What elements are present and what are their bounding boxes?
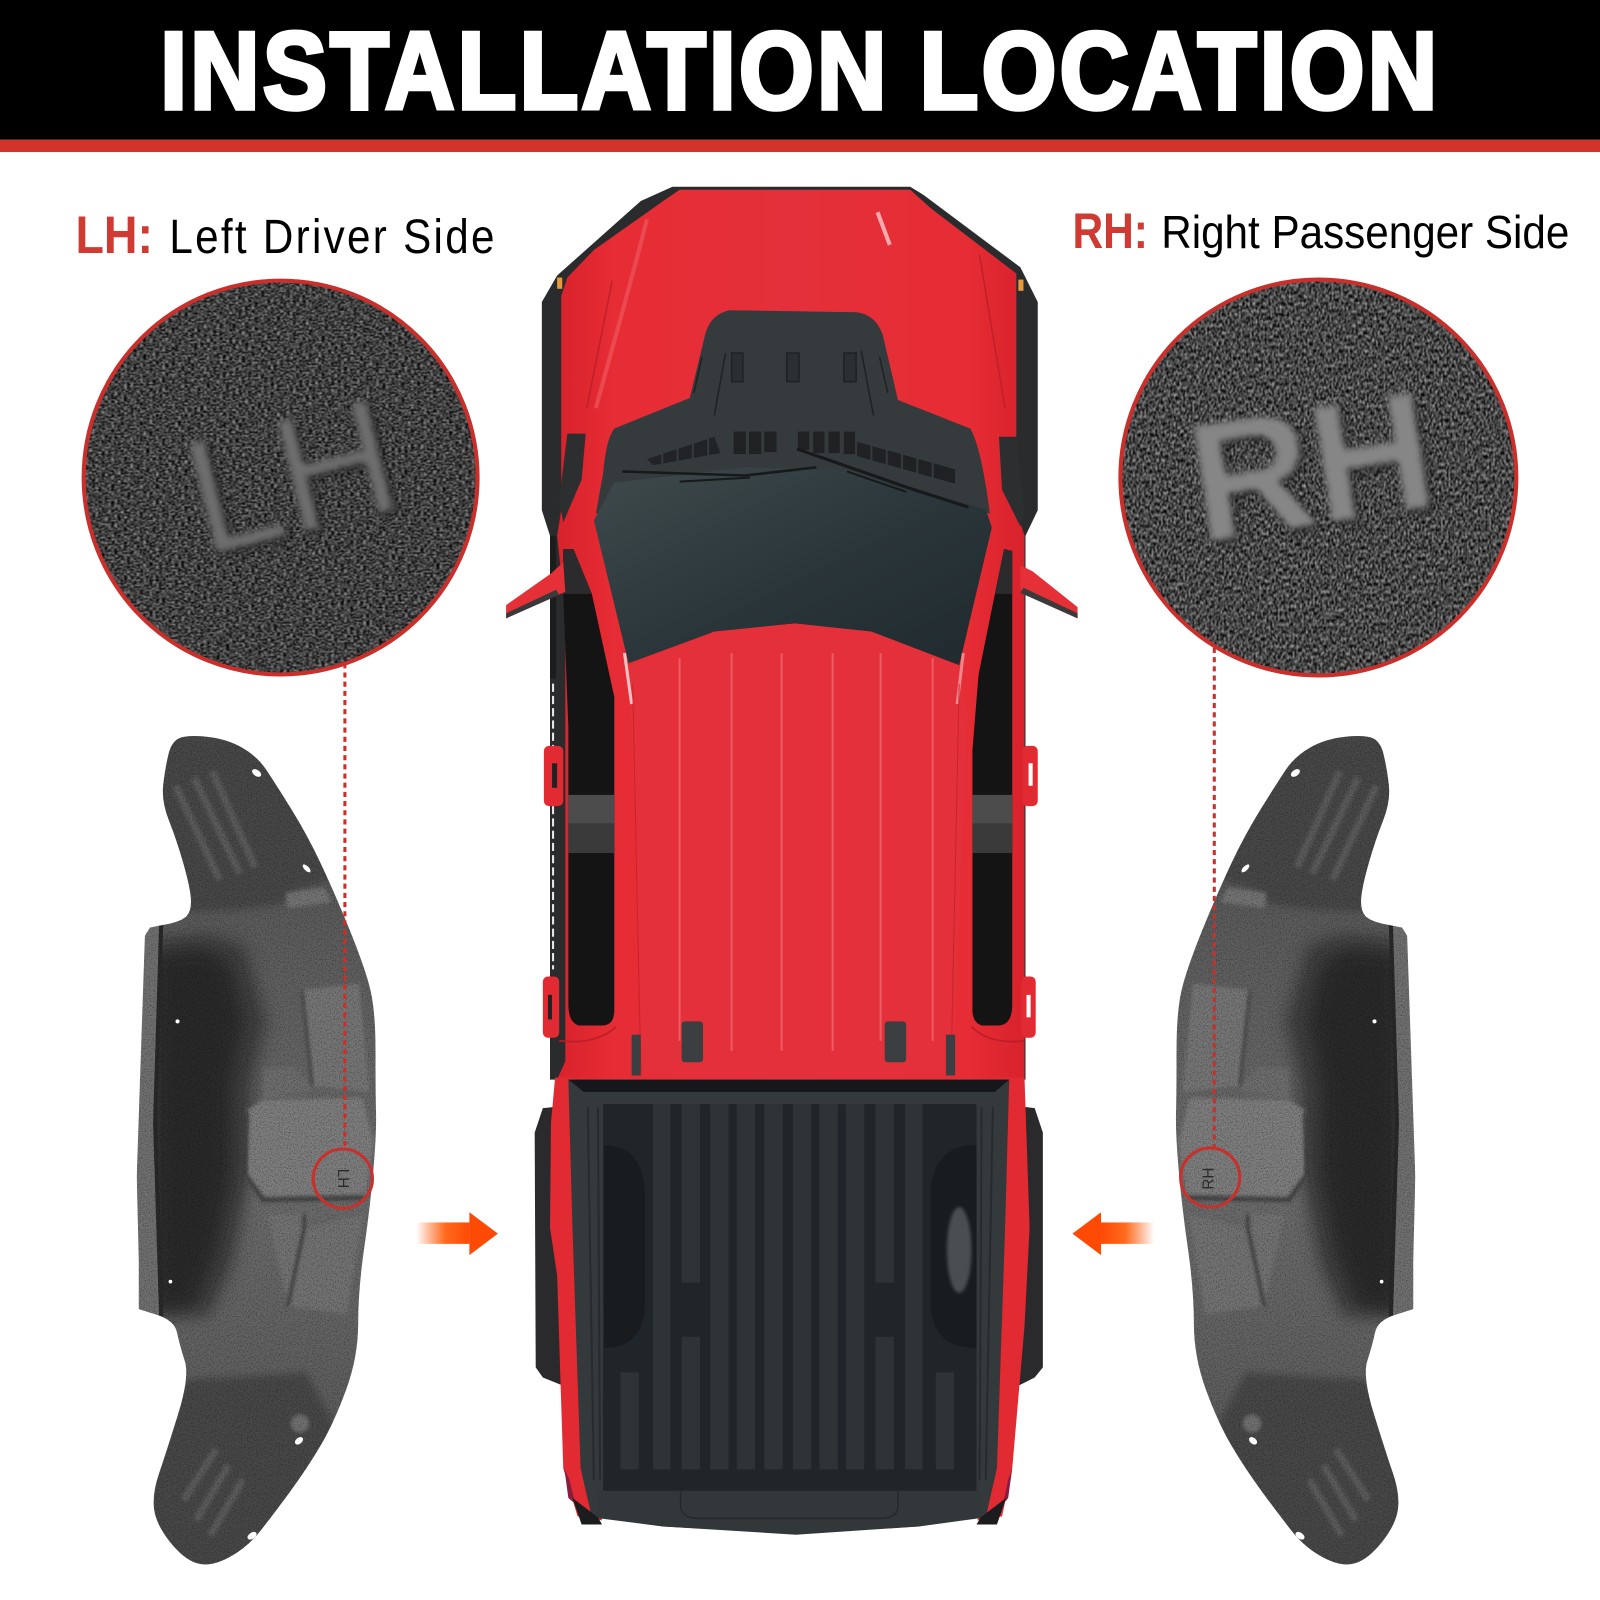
dark underbody and front fenders <box>542 187 1038 1080</box>
wipers <box>622 449 968 507</box>
tail lights <box>564 1468 1012 1504</box>
header banner <box>0 0 1600 152</box>
floor ribs <box>620 1104 954 1469</box>
hood highlights <box>587 212 1005 408</box>
left callout: dotted line and ring around LH mark: LH <box>334 1169 351 1188</box>
panel: RH felt close-up circle <box>1118 278 1518 678</box>
wheel well humps <box>604 1145 645 1348</box>
panel: LH felt close-up circle <box>82 280 480 678</box>
cowl vents <box>647 432 955 484</box>
roof <box>629 623 967 1076</box>
tailgate <box>598 1491 981 1534</box>
side cowl vents <box>559 434 1024 527</box>
label: RH right passenger side: RH: <box>1072 203 1148 259</box>
red body, hood and cab <box>557 190 1024 1080</box>
arrow: left liner to truck <box>416 1212 498 1255</box>
embossed letters LH: LH <box>168 362 415 590</box>
A-pillar highlights <box>624 653 963 704</box>
left wheel liner <box>133 730 383 1577</box>
door handles <box>543 746 1038 1038</box>
door windows <box>563 549 1012 1026</box>
side mirrors <box>506 562 1078 618</box>
label: LH left driver side: LH: <box>76 206 153 265</box>
bed floor <box>603 1104 977 1491</box>
door side dark strip with white marks <box>550 536 556 969</box>
right callout: dotted line and ring around RH mark <box>1181 648 1240 1207</box>
embossed letters RH: RH <box>1177 355 1446 578</box>
truck top view <box>506 187 1078 1535</box>
turn signals <box>557 278 1023 291</box>
label: RH right passenger side: Right Passenger Side <box>1161 206 1569 258</box>
label: LH left driver side: Left Driver Side <box>169 210 494 264</box>
truck bed <box>568 1080 1009 1535</box>
left callout: dotted line and ring around LH mark <box>313 663 372 1208</box>
roof highlight ribs <box>680 653 933 1051</box>
arrow: right liner to truck <box>1072 1212 1154 1255</box>
bumper corners <box>572 1498 1006 1524</box>
roof rear tabs <box>632 1021 955 1076</box>
rail stripes <box>588 1107 993 1480</box>
bed outer red sides <box>550 1078 1030 1520</box>
rear shoulder creases <box>559 1027 1024 1042</box>
windshield <box>594 467 992 665</box>
right callout: dotted line and ring around RH mark: RH <box>1200 1168 1217 1190</box>
title: INSTALLATION LOCATION <box>160 10 1437 132</box>
right wheel liner <box>1169 730 1419 1577</box>
hood scoop and cowl <box>596 310 990 513</box>
rear wheels <box>535 1106 1043 1386</box>
cab gap <box>568 1080 1009 1092</box>
scoop slots <box>694 351 888 415</box>
